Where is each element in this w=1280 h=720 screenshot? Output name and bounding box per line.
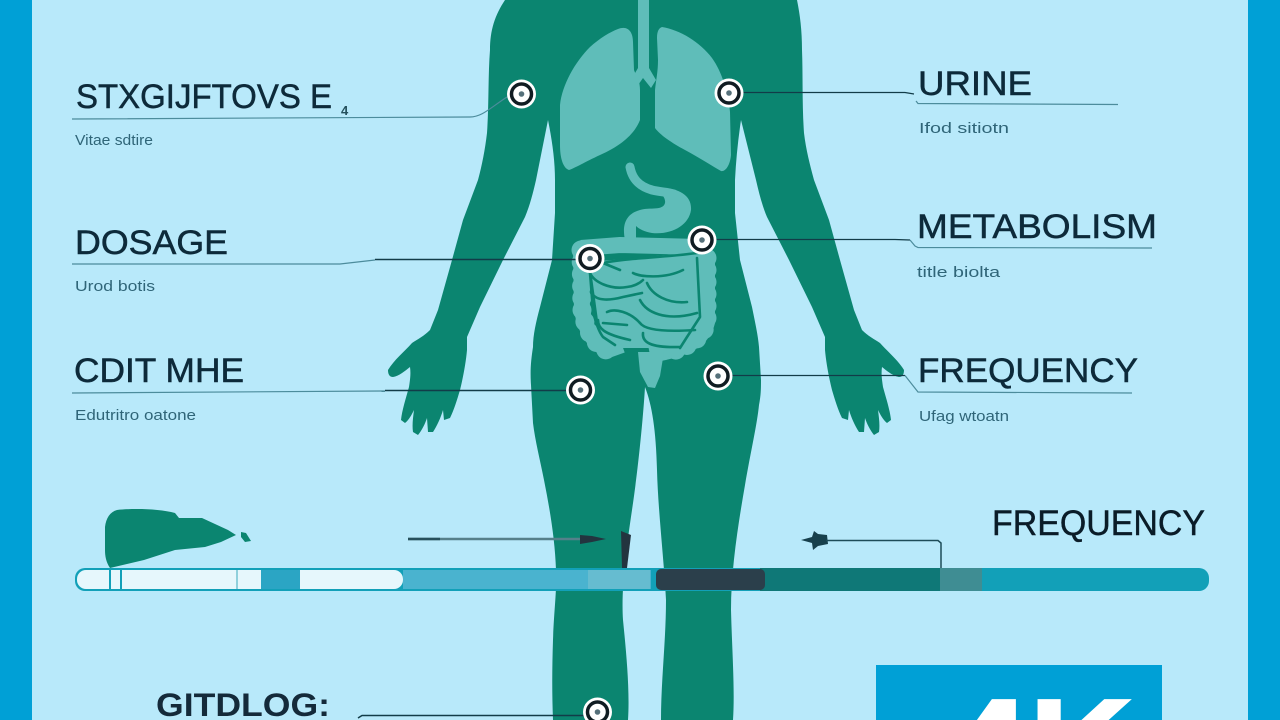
callout: symptoms <box>72 78 507 149</box>
callout: symptoms: 4 <box>341 103 349 118</box>
arrow: left-pointing marker <box>801 531 941 568</box>
timeline bar <box>75 568 1209 591</box>
callout: symptoms: STXGIJFTOVS E <box>76 78 332 116</box>
bottom connector <box>358 716 585 718</box>
right lung <box>655 27 731 171</box>
callout: frequency <box>731 352 1138 425</box>
trachea <box>631 0 656 88</box>
callout: dosage <box>72 224 578 295</box>
callout: dosage: DOSAGE <box>75 224 228 262</box>
left lung <box>560 28 640 170</box>
callout: dosage: Urod botis <box>75 278 155 295</box>
callout: cdit mhe <box>72 352 568 424</box>
left side band <box>0 0 32 720</box>
callout: cdit mhe: Edutritro oatone <box>75 407 196 424</box>
target markers <box>507 78 744 720</box>
callout: symptoms: Vitae sdtire <box>75 132 153 149</box>
callout: metabolism: title biolta <box>917 264 1001 281</box>
large and small intestine <box>581 245 707 388</box>
callout: frequency: Ufag wtoatn <box>919 408 1009 425</box>
callout: frequency: FREQUENCY <box>918 352 1138 390</box>
callout: cdit mhe: CDIT MHE <box>74 352 244 390</box>
callout: metabolism <box>715 208 1157 281</box>
icon: liver <box>105 509 251 568</box>
human body silhouette <box>388 0 904 720</box>
callout: urine: URINE <box>918 65 1032 103</box>
heading: frequency: FREQUENCY <box>992 504 1205 543</box>
arrow: right-pointing marker <box>408 531 631 568</box>
callout: urine <box>742 65 1118 137</box>
4K badge <box>876 665 1162 720</box>
callout: metabolism: METABOLISM <box>917 208 1157 246</box>
stomach <box>624 167 691 240</box>
right side band <box>1248 0 1280 720</box>
callout: urine: Ifod sitiotn <box>919 120 1009 137</box>
